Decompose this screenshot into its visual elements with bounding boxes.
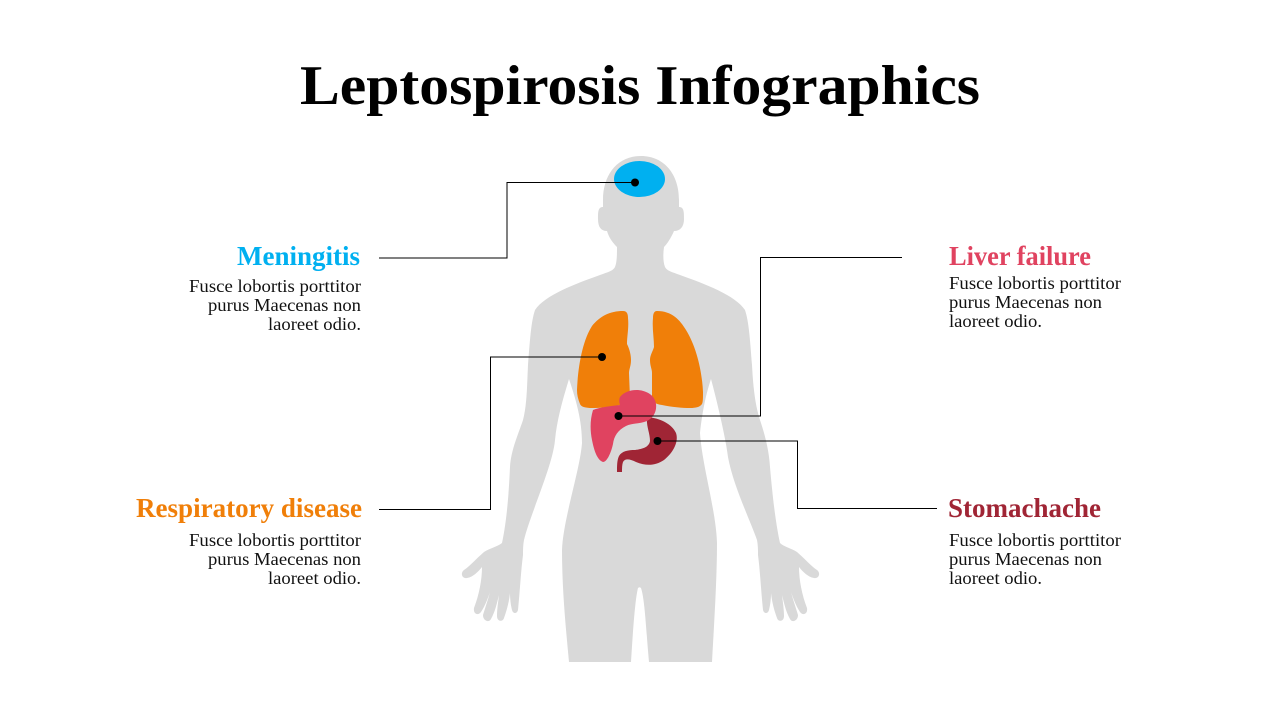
organ: liver [591,390,656,462]
connector: stomachache [654,437,937,508]
organ: stomach [617,417,677,472]
callout: liver failure: Fusce lobortis porttitor [949,273,1121,293]
callout: meningitis: laoreet odio. [268,314,361,334]
callout: stomachache [948,493,1121,588]
callout: stomachache: Fusce lobortis porttitor [949,530,1121,550]
organ: left lung [577,311,631,408]
callout: meningitis: Fusce lobortis porttitor [189,276,361,296]
callout: meningitis: purus Maecenas non [208,295,361,315]
connector: meningitis [379,178,639,258]
callout: respiratory disease: purus Maecenas non [208,549,361,569]
callout: respiratory disease [136,493,362,588]
callout: liver failure: purus Maecenas non [949,292,1102,312]
callout: respiratory disease: Fusce lobortis porttitor [189,530,361,550]
callout: liver failure [949,241,1121,331]
callout: liver failure: Liver failure [949,241,1091,271]
title: Leptospirosis Infographics [300,55,980,117]
callout: stomachache: laoreet odio. [949,568,1042,588]
callout: stomachache: Stomachache [948,493,1101,523]
callout: meningitis: Meningitis [237,241,360,271]
human body figure [462,156,819,662]
organ: right lung [650,311,703,408]
callout: liver failure: laoreet odio. [949,311,1042,331]
organ: brain [614,161,665,197]
callout: respiratory disease: laoreet odio. [268,568,361,588]
callout: stomachache: purus Maecenas non [949,549,1102,569]
connector: respiratory disease [379,353,606,510]
callout: meningitis [189,241,361,334]
body silhouette [462,156,819,662]
callout: respiratory disease: Respiratory disease [136,493,362,523]
connector: liver failure [614,258,902,420]
